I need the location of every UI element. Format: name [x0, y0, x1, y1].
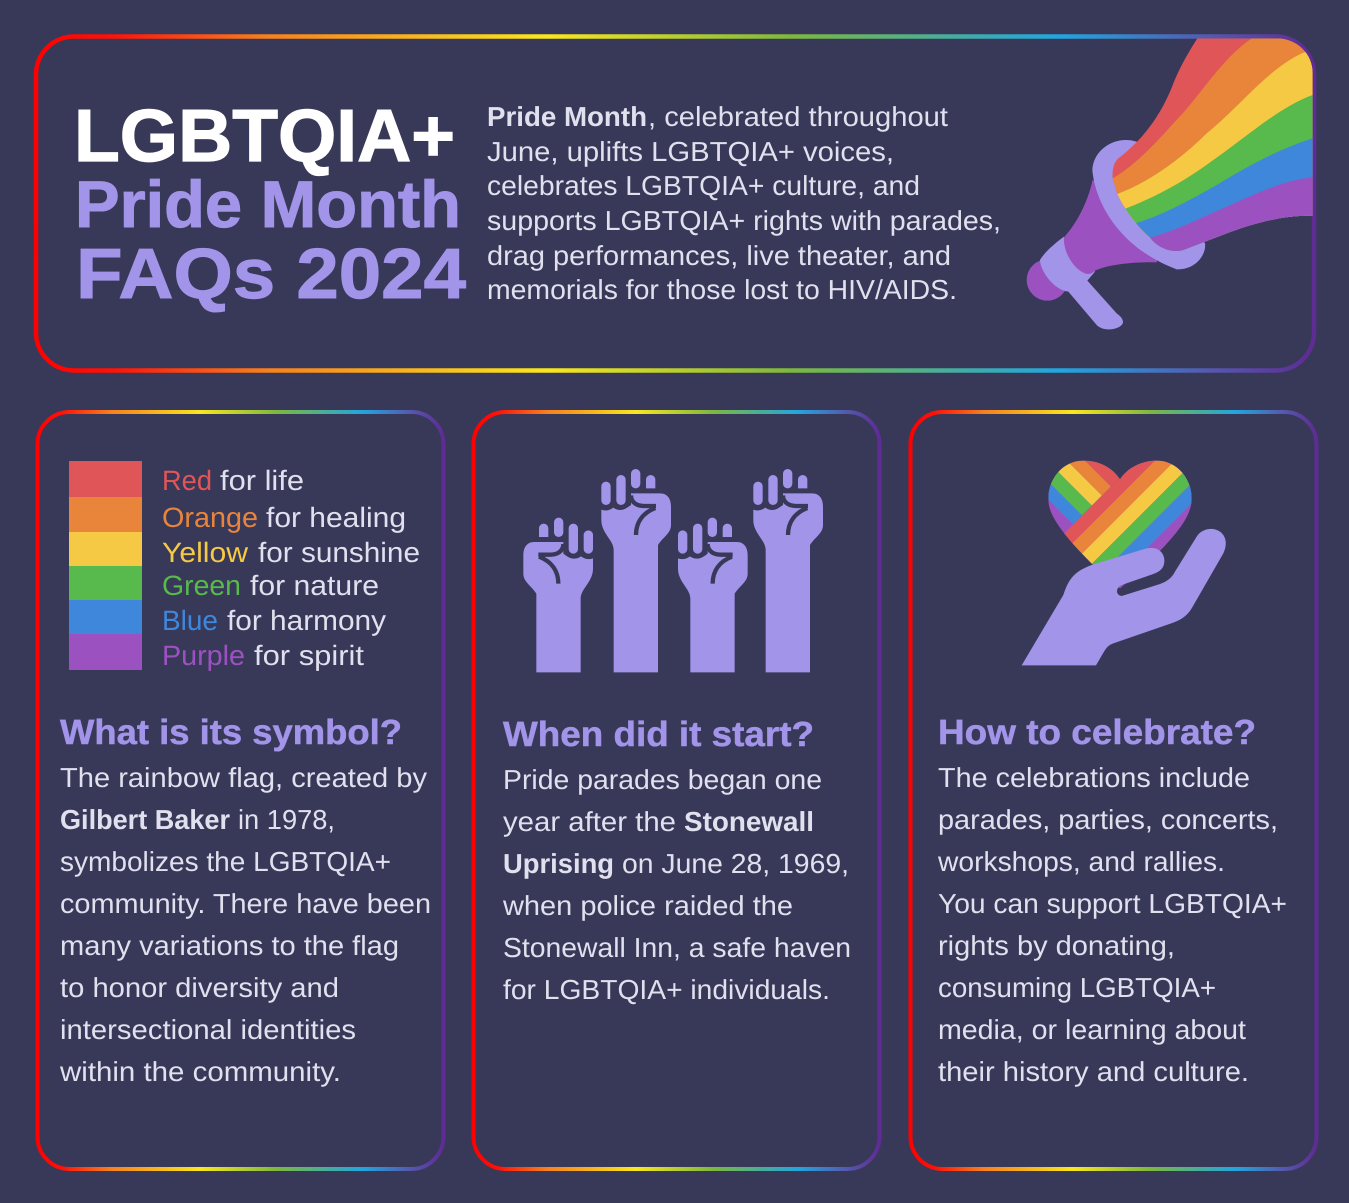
panel: start [474, 412, 880, 1169]
colour legend: for sunshine [258, 537, 420, 568]
body text [502, 764, 851, 1005]
body text: many variations to the flag [60, 930, 399, 961]
body text: year after the [503, 806, 676, 837]
panel: header [36, 33, 1317, 371]
body text: intersectional identities [60, 1014, 356, 1045]
intro text: June, uplifts LGBTQIA+ voices, [487, 136, 894, 167]
body text: on June 28, 1969, [622, 848, 849, 879]
body text [937, 762, 1287, 1087]
colour legend: for spirit [254, 640, 364, 671]
colour legend: for harmony [227, 605, 386, 636]
colour legend: Red [162, 465, 212, 496]
colour legend [162, 465, 420, 671]
title: LGBTQIA+ [74, 94, 455, 177]
body text: their history and culture. [938, 1056, 1249, 1087]
intro text: drag performances, live theater, and [487, 240, 951, 271]
icon: raised fists [523, 469, 823, 772]
card border [474, 412, 880, 1169]
body text: workshops, and rallies. [937, 846, 1225, 877]
panel: symbol [38, 412, 444, 1169]
body text: The celebrations include [938, 762, 1250, 793]
intro text: Pride Month [487, 101, 647, 132]
heading: How to celebrate? [938, 713, 1256, 752]
colour legend: Yellow [162, 537, 249, 568]
colour legend: Purple [162, 640, 245, 671]
colour legend: for nature [250, 570, 379, 601]
header rainbow border [36, 36, 1314, 370]
colour legend: Orange [162, 502, 258, 533]
body text: media, or learning about [938, 1014, 1246, 1045]
heading: When did it start? [503, 715, 814, 754]
intro text: , celebrated throughout [648, 101, 948, 132]
body text: when police raided the [502, 890, 793, 921]
icon: hand holding rainbow heart [1022, 460, 1226, 666]
body text: consuming LGBTQIA+ [938, 972, 1216, 1003]
card border [910, 412, 1316, 1169]
body text: in 1978, [238, 804, 335, 835]
body text: Stonewall [684, 806, 814, 837]
colour legend: Blue [162, 605, 218, 636]
body text: Stonewall Inn, a safe haven [503, 932, 851, 963]
body text: parades, parties, concerts, [938, 804, 1278, 835]
heading: What is its symbol? [60, 713, 402, 752]
rainbow flag swatch [69, 461, 142, 670]
body text: You can support LGBTQIA+ [938, 888, 1287, 919]
body text: symbolizes the LGBTQIA+ [60, 846, 391, 877]
body text: Gilbert Baker [60, 804, 230, 835]
body text [59, 762, 431, 1087]
body text: The rainbow flag, created by [60, 762, 427, 793]
panel: celebrate [910, 340, 1316, 1169]
colour legend: for healing [266, 502, 406, 533]
icon: rainbow megaphone [1027, 33, 1317, 329]
intro text: supports LGBTQIA+ rights with parades, [487, 205, 1001, 236]
body text: within the community. [59, 1056, 341, 1087]
intro text: memorials for those lost to HIV/AIDS. [487, 274, 957, 305]
body text: Pride parades began one [503, 764, 822, 795]
body text: rights by donating, [938, 930, 1175, 961]
card border [38, 412, 444, 1169]
intro text: celebrates LGBTQIA+ culture, and [487, 170, 920, 201]
body text: for LGBTQIA+ individuals. [503, 974, 830, 1005]
body text: community. There have been [60, 888, 431, 919]
colour legend: Green [162, 570, 241, 601]
title: FAQs 2024 [76, 235, 467, 314]
title: Pride Month [75, 167, 461, 241]
intro text [487, 101, 1001, 305]
colour legend: for life [220, 465, 304, 496]
body text: Uprising [503, 848, 614, 879]
title [74, 94, 467, 314]
body text: to honor diversity and [60, 972, 339, 1003]
